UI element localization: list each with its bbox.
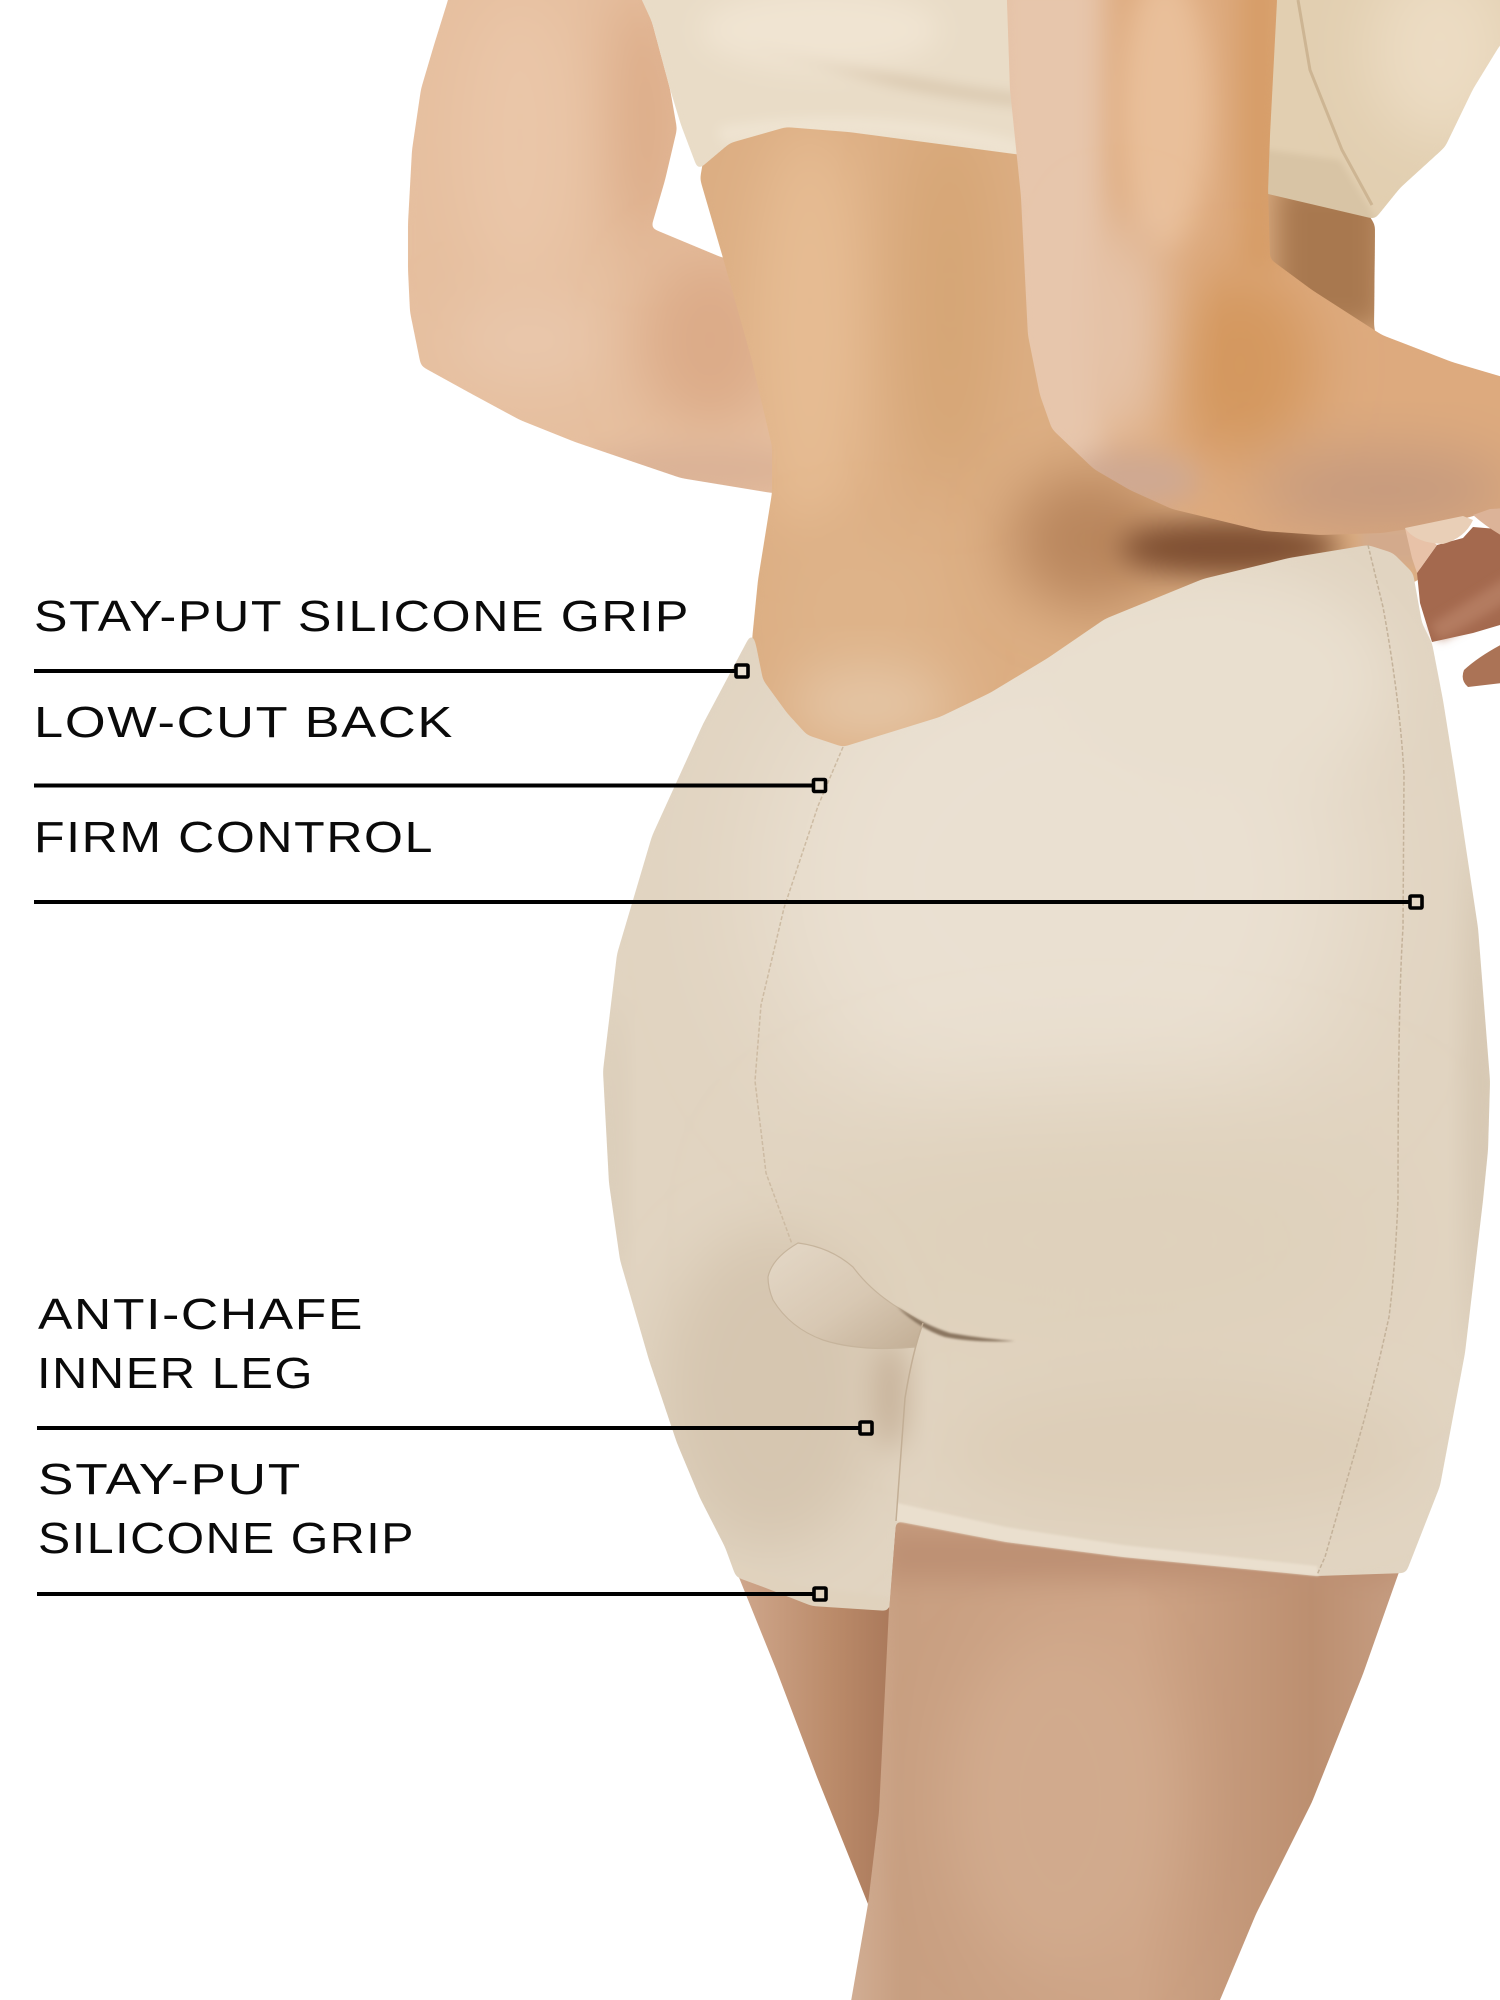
label: low-cut back [34, 699, 826, 792]
label: firm control: FIRM CONTROL [34, 814, 434, 862]
right leg [851, 1522, 1399, 2000]
centre back seam [755, 747, 843, 1244]
label: stay-put silicone grip (hem): STAY-PUT [38, 1456, 302, 1504]
label: low-cut back: LOW-CUT BACK [34, 699, 454, 747]
bra cup [1255, 0, 1500, 222]
label: anti-chafe inner leg [37, 1291, 872, 1434]
bra cup seam [1298, 0, 1372, 205]
side seam [1317, 545, 1404, 1575]
label: stay-put silicone grip (top): STAY-PUT SILICONE GRIP [34, 593, 690, 641]
inner leg edge [896, 1323, 923, 1521]
label: anti-chafe inner leg: INNER LEG [37, 1350, 314, 1398]
label: stay-put silicone grip (top) [34, 593, 748, 677]
anti-chafe gusset [768, 1243, 923, 1348]
back torso [700, 127, 1420, 746]
label: anti-chafe inner leg: ANTI-CHAFE [38, 1291, 364, 1339]
label: stay-put silicone grip (hem): SILICONE GRIP [38, 1515, 415, 1563]
left leg [738, 1575, 895, 1904]
right hem band [896, 1503, 1319, 1576]
figure: model wearing shapewear shorts [400, 0, 1500, 2000]
left arm [408, 0, 772, 493]
bra back band [642, 0, 1017, 167]
shorts [590, 530, 1500, 1630]
label: firm control [34, 814, 1422, 908]
right arm [990, 0, 1500, 540]
label: stay-put silicone grip (hem) [37, 1456, 826, 1600]
cheek fold [897, 1307, 1015, 1342]
hand [1405, 508, 1500, 687]
